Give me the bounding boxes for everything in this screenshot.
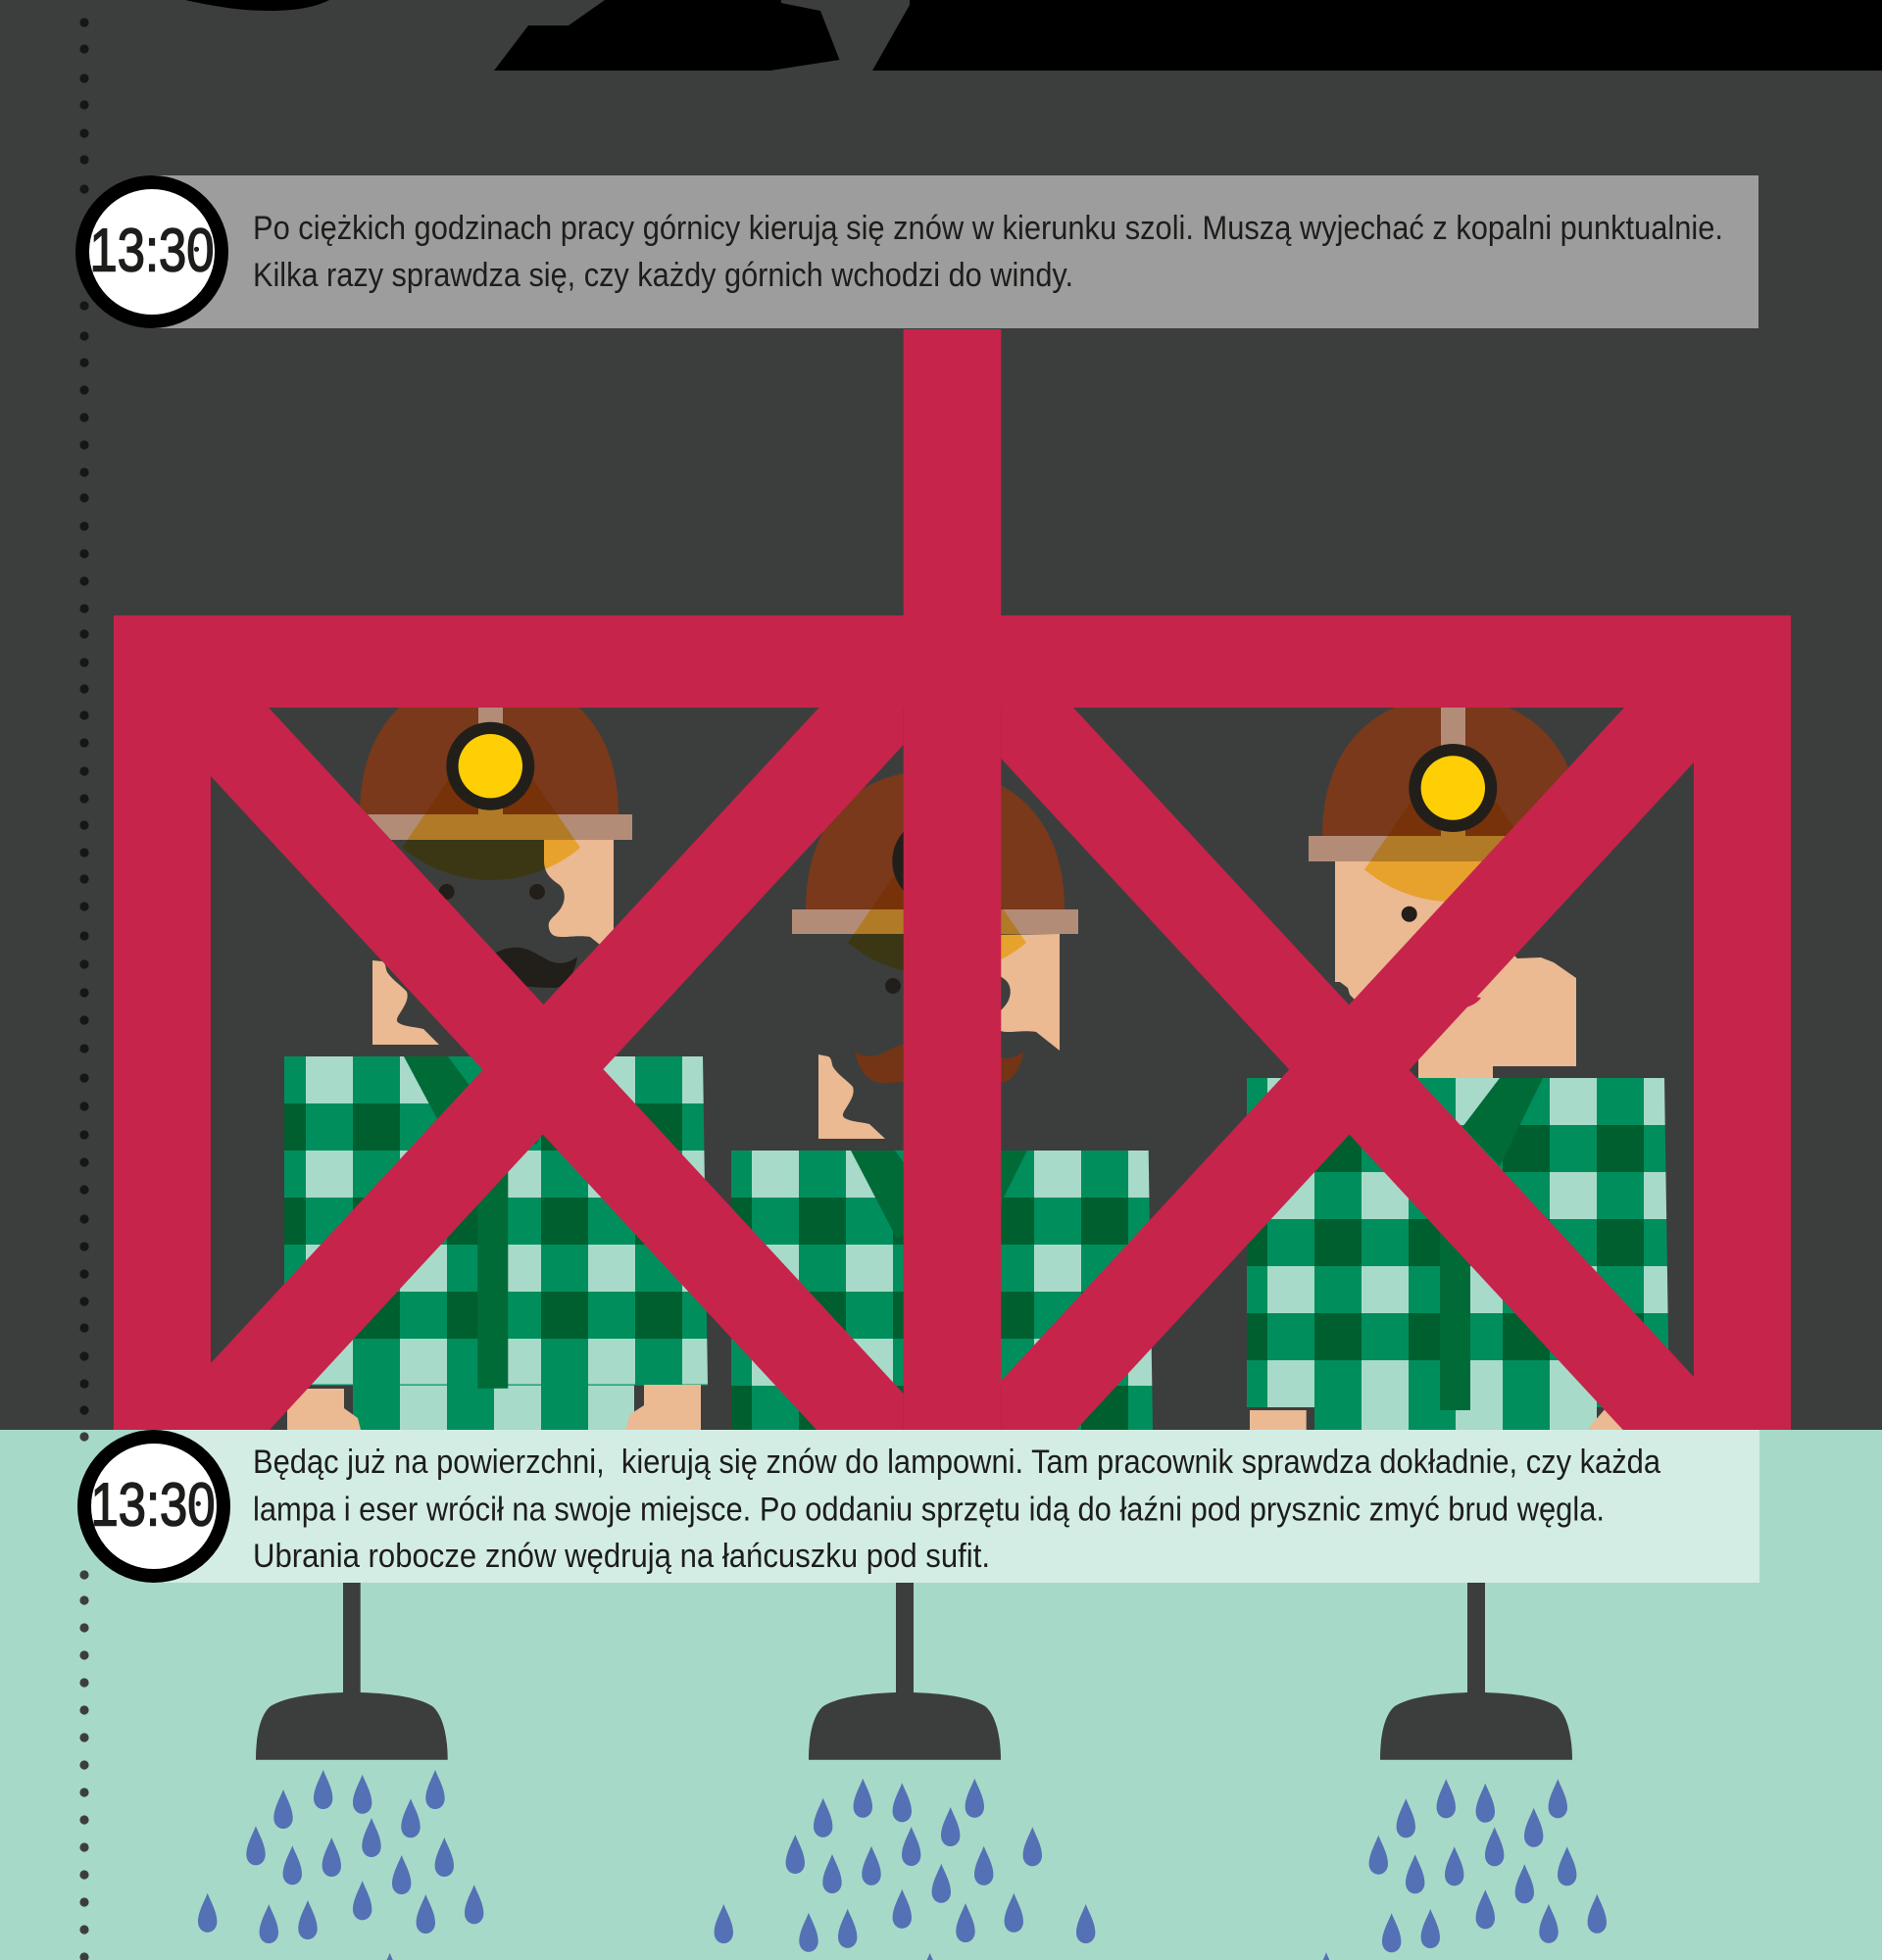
miner 1 eyes	[439, 884, 545, 900]
miner 2 collar and tie	[851, 1151, 1027, 1239]
miner 2 moustache	[855, 1043, 1023, 1083]
left cross bracing, falling band	[211, 708, 904, 1430]
miner 2	[731, 770, 1153, 1430]
miner 3 plaid shirt	[1247, 1078, 1669, 1407]
shower 2	[715, 1583, 1095, 1960]
clock badge 13:30, mine	[82, 182, 222, 321]
miner 2 neck	[818, 1054, 885, 1139]
headlamp light cones	[402, 781, 1543, 975]
light panel background	[154, 1430, 1759, 1583]
miner 2 helmet brim and strap	[792, 784, 1078, 934]
miner 1 moustache	[409, 948, 577, 988]
shower 3	[1316, 1583, 1607, 1960]
cage beam, hanger and posts	[114, 329, 1791, 1430]
clock badge 13:30, mine: 13:30	[90, 218, 214, 285]
miner 3 face and neck	[1335, 861, 1576, 1132]
miner 2 eyes	[885, 978, 991, 994]
miner 1	[284, 675, 708, 1430]
miner 1 plaid shirt	[284, 1056, 708, 1385]
shower 3 head and pipe	[1380, 1583, 1572, 1760]
timeline dots, mine section	[79, 18, 89, 1415]
miner 3 moustache	[1458, 996, 1481, 1009]
headlamps	[446, 722, 1497, 906]
miner 2 helmet	[806, 770, 1065, 909]
caption text, miners return to shaft	[253, 210, 1723, 294]
miner 1 neck	[372, 960, 439, 1045]
shower 3 water drops	[1316, 1779, 1607, 1960]
miner 3	[1247, 697, 1669, 1430]
red elevator cage frame	[114, 329, 1791, 1430]
caption text, surface and showers: Ubrania robocze znów wędrują na łańcuszku pod sufit.	[253, 1538, 990, 1575]
right cross bracing, falling band	[1001, 708, 1694, 1430]
caption text, surface and showers	[253, 1444, 1660, 1575]
headlamp miner 1	[446, 722, 534, 810]
clock badge 13:30, surface	[84, 1437, 223, 1576]
miner 1 face	[544, 840, 614, 956]
miner 3 hands	[1250, 1407, 1647, 1430]
right cross bracing, rising band	[1001, 708, 1694, 1430]
miner 2 face	[990, 934, 1060, 1051]
caption text, surface and showers: lampa i eser wrócił na swoje miejsce. Po oddaniu sprzętu idą do łaźni pod prysznic zmyć brud węgla.	[253, 1492, 1605, 1529]
mint surface background	[0, 1430, 1882, 1960]
clock badge 13:30, surface: 13:30	[90, 1472, 216, 1540]
miner 3 collar and tie	[1366, 1078, 1543, 1410]
caption text, surface and showers: Będąc już na powierzchni, kierują się znów do lampowni. Tam pracownik sprawdza dokładnie, czy każda	[253, 1444, 1660, 1481]
timeline dots, surface section	[79, 1432, 89, 1960]
light caption panel	[154, 1430, 1759, 1583]
miner 2 plaid shirt	[731, 1151, 1153, 1430]
miner 1 helmet brim and strap	[346, 686, 632, 840]
miner 1 collar and tie	[404, 1056, 580, 1389]
grey caption panel	[152, 175, 1758, 328]
dark mine background	[0, 0, 1882, 1430]
shower 1	[198, 1583, 483, 1960]
miner 3 helmet	[1322, 697, 1581, 836]
black rock silhouettes at top	[185, 0, 1882, 71]
miner 1 hands	[287, 1385, 701, 1430]
shower 1 head and pipe	[256, 1583, 448, 1760]
miner 3 eye	[1402, 906, 1417, 922]
headlamp miner 2	[892, 817, 980, 906]
miner 1 helmet	[360, 675, 619, 814]
headlamp miner 3	[1409, 744, 1497, 832]
shower 2 head and pipe	[809, 1583, 1001, 1760]
miner 3 helmet brim and strap	[1309, 701, 1595, 861]
miner 1 trousers plaid	[312, 1384, 708, 1430]
shower 2 water drops	[715, 1779, 1095, 1960]
caption text, miners return to shaft: Po ciężkich godzinach pracy górnicy kierują się znów w kierunku szoli. Muszą wyjechać z kopalni punktualnie.	[253, 210, 1723, 247]
shower 1 water drops	[198, 1770, 483, 1960]
grey panel background	[152, 175, 1758, 328]
left cross bracing, rising band	[211, 708, 904, 1430]
caption text, miners return to shaft: Kilka razy sprawdza się, czy każdy górnich wchodzi do windy.	[253, 257, 1073, 294]
miner 3 trousers plaid	[1314, 1407, 1597, 1430]
